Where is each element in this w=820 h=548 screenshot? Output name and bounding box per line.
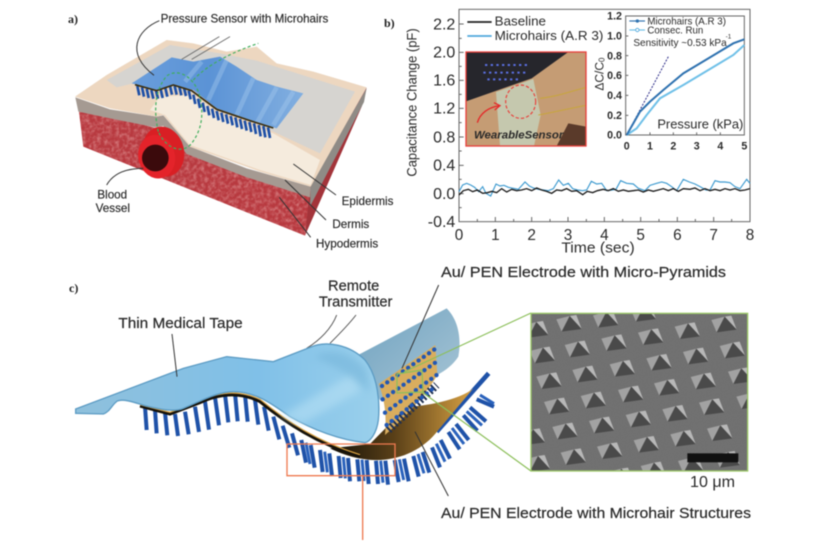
label: dermis: Dermis <box>332 218 369 231</box>
vessel opening <box>134 131 180 182</box>
hypodermis mottled texture <box>78 107 310 236</box>
connector wires <box>182 37 230 59</box>
lead wires <box>538 87 586 115</box>
sensor ridges <box>185 60 293 125</box>
dark corner <box>557 123 586 146</box>
inset frame <box>626 16 744 135</box>
curve: microhairs <box>627 39 744 135</box>
electrode panel <box>379 345 437 435</box>
leader: microhair electrode <box>415 432 448 496</box>
dermis band <box>75 97 311 197</box>
hypodermis right face <box>305 87 367 236</box>
inset x numbers: 0 <box>624 140 630 152</box>
inset y numbers: 1.0 <box>607 31 622 43</box>
plot frame <box>459 9 750 222</box>
red dashed circle <box>506 85 536 118</box>
inset y numbers: 1.2 <box>607 11 622 23</box>
y axis numbers: 0.8 <box>433 129 455 146</box>
x axis numbers: 4 <box>600 227 609 244</box>
inset y numbers: 0.4 <box>607 90 622 102</box>
inset x title: Pressure (kPa) <box>657 118 743 132</box>
label: pressure sensor: Pressure Sensor with Microhairs <box>161 13 328 26</box>
label: b): b) <box>384 16 395 30</box>
tape top surface <box>76 344 379 443</box>
inset y title: ΔC/C <box>592 62 606 91</box>
y axis numbers <box>428 16 455 231</box>
inset legend: -1 <box>726 33 732 40</box>
photo border <box>466 52 586 146</box>
electrode dark shadow hairs <box>388 385 437 430</box>
tape shaded shoulder <box>313 352 370 393</box>
panel b: capacitance chart <box>404 9 754 257</box>
inset ticks <box>626 36 720 135</box>
photo content <box>466 52 586 146</box>
microhairs under tape <box>145 393 494 485</box>
inset x numbers: 5 <box>741 140 747 152</box>
label: blood vessel: Blood <box>97 189 127 202</box>
x axis numbers: 3 <box>564 227 572 244</box>
inset y title: 0 <box>598 57 607 62</box>
y axis numbers: -0.4 <box>428 214 455 231</box>
y axis numbers: 1.6 <box>433 73 455 90</box>
blue sensor <box>132 57 303 128</box>
label: c): c) <box>69 281 78 295</box>
medical tape on skin <box>107 45 355 153</box>
inset legend <box>629 17 732 49</box>
inset y numbers: 0.0 <box>607 130 622 142</box>
photo caption: WearableSensor <box>474 130 564 142</box>
inset x numbers <box>624 140 747 152</box>
inset chart <box>592 11 747 152</box>
label: thin medical tape: Thin Medical Tape <box>118 316 243 332</box>
y axis numbers: 2.0 <box>433 45 455 62</box>
label: microhair electrode: Au/ PEN Electrode with Microhair Structures <box>441 506 751 522</box>
red arrow <box>477 103 500 123</box>
legend: microhairs <box>467 33 492 38</box>
series: baseline <box>459 188 750 195</box>
light skin cutaway <box>150 95 320 185</box>
x axis numbers <box>455 227 754 244</box>
hypodermis front face <box>78 107 310 236</box>
gold and black film edge <box>140 395 360 457</box>
tape highlight stripe <box>280 373 362 423</box>
SEM border <box>531 313 748 471</box>
x axis numbers: 5 <box>636 227 645 244</box>
arrow: blood vessel callout <box>107 168 143 185</box>
vessel lumen <box>142 145 169 171</box>
inset legend: Consec. Run <box>647 25 703 36</box>
inset x numbers: 3 <box>694 140 700 152</box>
green zoom connector <box>397 313 531 471</box>
x axis numbers: 8 <box>746 227 754 244</box>
inset x numbers: 2 <box>670 140 676 152</box>
inset y numbers: 0.8 <box>607 50 622 62</box>
panel c: sensor cross-section illustration <box>76 278 494 540</box>
legend: baseline <box>467 19 492 24</box>
pyramid rows <box>382 348 437 425</box>
x axis numbers: 2 <box>527 227 536 244</box>
inset y numbers <box>607 11 622 142</box>
x axis title: Time (sec) <box>561 241 635 257</box>
microhairs second row <box>306 395 494 483</box>
series: microhairs <box>459 179 750 196</box>
label: a): a) <box>68 12 78 26</box>
right side grey band <box>310 88 367 207</box>
upper electrode with micro-pyramids <box>379 345 437 435</box>
axis ticks <box>459 24 732 222</box>
photo inset: wearable sensor <box>466 52 586 146</box>
SEM background <box>531 313 748 471</box>
label: remote transmitter: Remote <box>328 278 379 294</box>
SEM grain <box>531 313 748 471</box>
inset x numbers: 1 <box>647 140 653 152</box>
sensor edge: gold electrode <box>135 85 273 128</box>
label: blood vessel: Vessel <box>96 202 130 215</box>
leader: thin medical tape <box>172 334 177 377</box>
keyboard <box>466 52 568 101</box>
panel a: skin block illustration <box>75 13 394 250</box>
curve: consecutive run <box>627 45 744 135</box>
arrow: sensor callout <box>137 21 159 75</box>
x axis numbers: 7 <box>709 227 718 244</box>
legend: Baseline <box>495 14 546 28</box>
back of curled tape <box>355 308 460 400</box>
orange detail box <box>287 444 395 540</box>
green dashed outline <box>156 43 258 149</box>
x axis numbers: 1 <box>491 227 500 244</box>
y axis title: Capacitance Change (pF) <box>404 28 420 177</box>
y axis numbers: 0.0 <box>433 186 455 203</box>
epidermis top surface <box>75 40 367 187</box>
x axis numbers: 0 <box>455 227 463 244</box>
gold film highlight <box>140 393 360 455</box>
label: hypodermis: Hypodermis <box>316 237 378 250</box>
label: scale: 10 μm <box>690 474 735 491</box>
y axis numbers: 0.4 <box>433 158 455 175</box>
inset x numbers: 4 <box>717 140 723 152</box>
label: remote transmitter <box>319 278 393 311</box>
lower electrode blue edge <box>437 373 489 432</box>
inset legend: Sensitivity ~0.53 kPa <box>633 38 727 49</box>
y axis numbers: 2.2 <box>433 16 455 33</box>
label: epidermis: Epidermis <box>342 195 394 208</box>
inset y numbers: 0.6 <box>607 70 622 82</box>
label: micro-pyramid electrode: Au/ PEN Electrode with Micro-Pyramids <box>441 265 726 281</box>
panel: SEM micrograph of pyramids <box>530 312 749 472</box>
microhairs <box>137 86 270 138</box>
keyboard lights <box>483 65 528 79</box>
x axis numbers: 6 <box>673 227 682 244</box>
y axis numbers: 1.2 <box>433 101 455 118</box>
pyramid array <box>520 305 762 484</box>
inset legend: Microhairs (A.R 3) <box>647 17 726 28</box>
wires to remote transmitter <box>307 315 356 348</box>
leader: micro-pyramids <box>402 285 439 368</box>
label: blood vessel <box>96 189 130 215</box>
lower gold electrode <box>330 388 473 460</box>
scale bar <box>687 453 738 462</box>
sensor band <box>496 79 541 146</box>
legend: Microhairs (A.R 3) <box>495 29 603 43</box>
inset y numbers: 0.2 <box>607 110 622 122</box>
arm <box>466 52 586 146</box>
legend <box>467 14 603 43</box>
sensitivity fit line <box>627 57 668 135</box>
leader lines to layers <box>279 164 336 237</box>
label: remote transmitter: Transmitter <box>319 295 393 311</box>
vessel tube <box>137 122 190 181</box>
blood vessel <box>134 122 190 182</box>
